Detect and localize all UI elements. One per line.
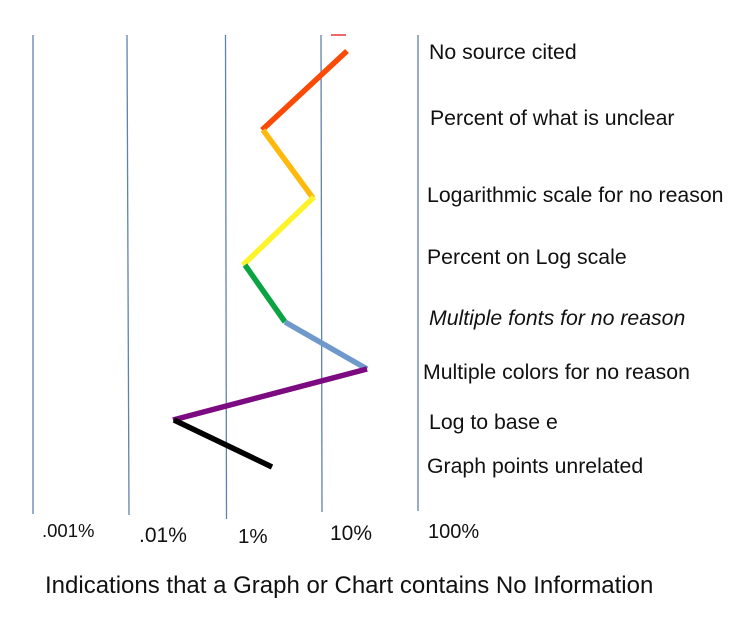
segment: no source cited	[262, 51, 347, 130]
title: Indications that a Graph or Chart contains No Information	[45, 572, 653, 599]
label: Percent of what is unclear: Percent of what is unclear	[430, 106, 674, 130]
segment: multiple colors	[173, 369, 367, 420]
label: Graph points unrelated: Graph points unrelated	[427, 454, 643, 478]
axis label: 10%: 10%	[330, 522, 372, 545]
label: No source cited: No source cited	[429, 40, 577, 64]
segment: log to base e	[174, 420, 272, 467]
axis label: 1%: 1%	[238, 525, 268, 548]
axis label: .01%: .01%	[139, 524, 187, 547]
label: Multiple colors for no reason: Multiple colors for no reason	[423, 360, 690, 384]
label: Percent on Log scale: Percent on Log scale	[427, 245, 627, 269]
segment: percent of what is unclear	[263, 130, 313, 198]
segment: percent on log scale	[245, 265, 285, 322]
segment: multiple fonts	[285, 322, 367, 369]
line chart segments	[173, 51, 367, 467]
vertical log scale gridlines	[33, 35, 418, 519]
small red dash	[331, 34, 346, 36]
segment: logarithmic scale	[243, 197, 314, 265]
label: Multiple fonts for no reason: Multiple fonts for no reason	[429, 306, 685, 330]
label: Log to base e: Log to base e	[429, 410, 558, 434]
axis label: .001%: .001%	[42, 520, 94, 541]
axis label: 100%: 100%	[428, 521, 479, 543]
label: Logarithmic scale for no reason: Logarithmic scale for no reason	[427, 183, 723, 207]
